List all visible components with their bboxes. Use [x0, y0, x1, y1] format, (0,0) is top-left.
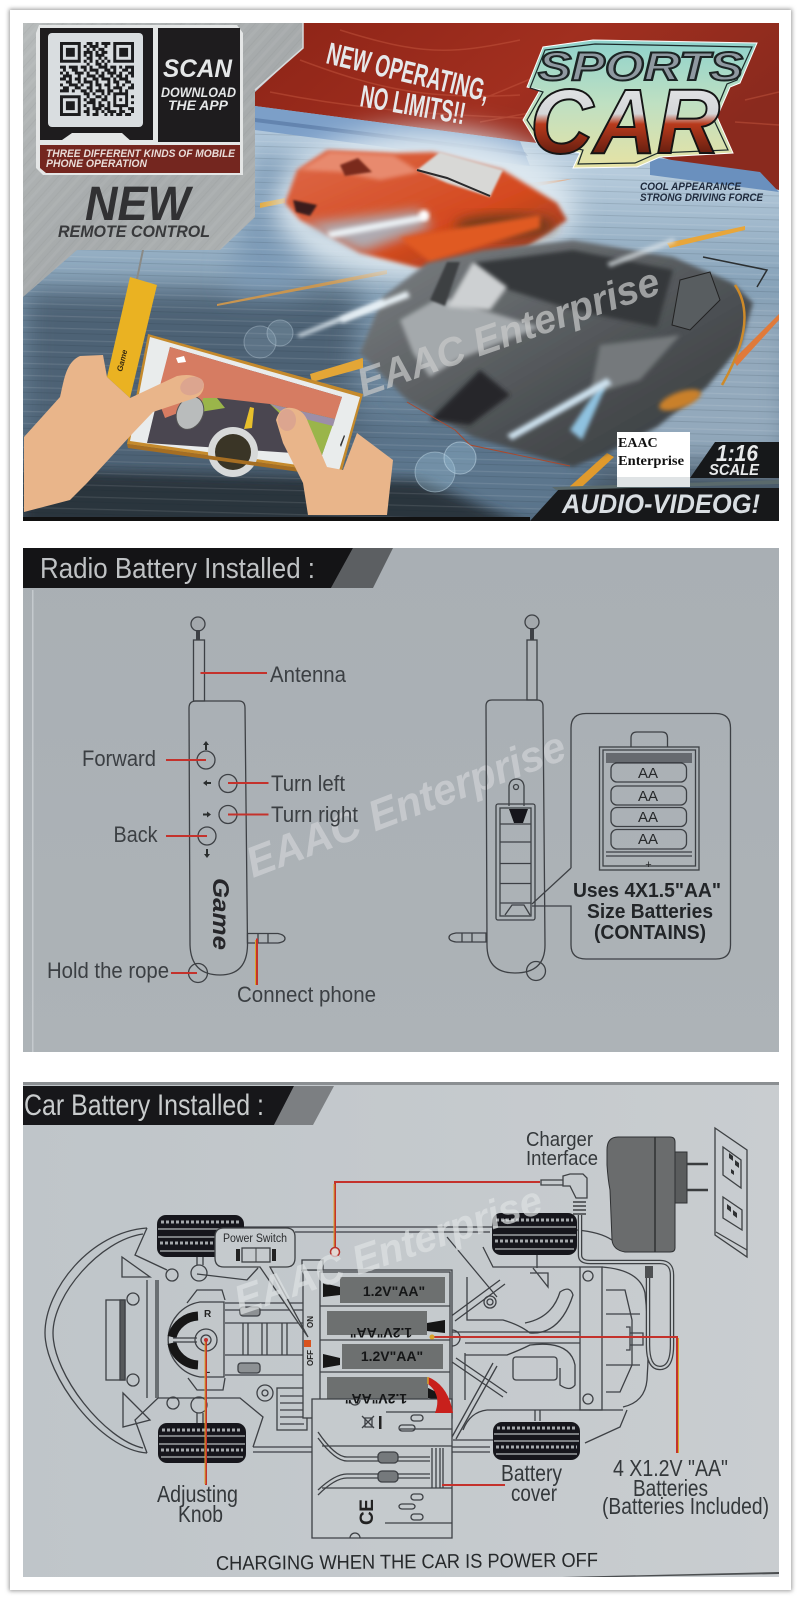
battery cells	[323, 1277, 445, 1400]
battery holder text: AA	[638, 831, 658, 848]
NEW remote control heading: REMOTE CONTROL	[58, 222, 210, 241]
disposal mark	[362, 1416, 382, 1429]
yellow remote in hand: Game	[115, 348, 129, 372]
tagline: cool appearance: STRONG DRIVING FORCE	[640, 192, 764, 204]
turn left label	[228, 771, 345, 796]
car chassis	[45, 1213, 648, 1538]
CE mark: CE	[357, 1499, 378, 1525]
battery description: (CONTAINS)	[594, 922, 706, 944]
logo: Sports Car	[523, 40, 757, 168]
back label	[114, 822, 207, 847]
front bumper and frame	[45, 1227, 492, 1453]
charging note: CHARGING WHEN THE CAR IS POWER OFF	[216, 1550, 598, 1575]
power switch callout: Power Switch	[223, 1233, 287, 1245]
section heading	[23, 548, 393, 588]
battery description	[573, 880, 721, 944]
charger interface label: Charger	[526, 1129, 593, 1151]
forward label: Forward	[82, 746, 156, 771]
watermark: EAAC Enterprise	[240, 722, 573, 887]
batteries label	[602, 1455, 769, 1519]
scan text: SCAN	[163, 55, 233, 83]
slogan: new operating, no limits	[326, 42, 486, 124]
battery description: Uses 4X1.5"AA"	[573, 880, 721, 902]
callout lines and labels	[47, 662, 376, 1007]
rear frame and suspension	[444, 1230, 648, 1443]
back label: Back	[114, 822, 158, 847]
charger adapter	[580, 1137, 708, 1368]
logo word SPORTS: SPORTS	[538, 45, 743, 89]
turn left label: Turn left	[271, 771, 345, 796]
remote body	[189, 701, 248, 975]
forward label	[82, 746, 206, 771]
battery holder	[600, 732, 699, 870]
adjusting knob assembly: L	[204, 1365, 210, 1376]
battery cover label: cover	[511, 1480, 557, 1506]
panel: product box cover	[23, 23, 790, 530]
scan text: THE APP	[168, 98, 229, 113]
charger interface label	[526, 1129, 598, 1170]
slogan: new operating, no limits: NO LIMITS!!	[358, 78, 468, 131]
battery cover	[312, 1399, 452, 1538]
1:16 scale tag	[690, 440, 779, 479]
battery holder text: +	[645, 859, 652, 871]
adjusting knob label: Adjusting	[157, 1481, 238, 1507]
remote back view	[449, 615, 546, 980]
1:16 scale tag: 1:16	[716, 440, 758, 466]
power switch callout: OFF	[306, 1350, 315, 1366]
red removal arrow	[428, 1377, 453, 1413]
EAAC Enterprise stamp: EAAC	[618, 436, 658, 451]
turn right label: Turn right	[271, 802, 358, 827]
adjusting knob label: Knob	[178, 1501, 223, 1527]
wall outlet	[715, 1128, 747, 1257]
EAAC Enterprise stamp	[617, 432, 690, 487]
battery description: Size Batteries	[587, 901, 713, 923]
battery holder text: AA	[638, 765, 658, 782]
grey badge plate	[23, 23, 303, 297]
battery cover label: Battery	[501, 1460, 562, 1486]
NEW remote control heading: NEW	[85, 178, 193, 231]
charger plug	[541, 1174, 587, 1214]
audio-video banner: AUDIO-VIDEOG!	[561, 489, 760, 519]
plug	[248, 934, 285, 943]
red band caption	[46, 150, 236, 167]
QR code	[60, 43, 134, 115]
red band caption: THREE DIFFERENT KINDS OF MOBILE	[46, 148, 236, 160]
road background	[23, 68, 779, 521]
speed streaks	[217, 179, 779, 510]
game logo: Game	[208, 878, 234, 950]
watermark: EAAC Enterprise	[228, 1177, 548, 1324]
arrow marks	[203, 741, 211, 858]
remote front view	[188, 617, 285, 982]
red sky with streaks	[255, 23, 779, 190]
antenna label: Antenna	[270, 662, 347, 687]
battery labels: 1.2V"AA"	[363, 1283, 425, 1299]
battery compartment	[496, 779, 535, 920]
adjusting knob label	[157, 1481, 238, 1527]
tagline: cool appearance	[640, 182, 764, 201]
batteries label: Batteries	[633, 1475, 708, 1501]
wheels	[157, 1213, 580, 1463]
blue track band	[255, 106, 779, 192]
red leader lines	[204, 1182, 678, 1485]
QR scan badge	[36, 25, 243, 175]
red car	[275, 130, 575, 280]
battery labels	[345, 1283, 425, 1407]
right hand	[276, 408, 393, 515]
audio-video banner	[530, 480, 779, 521]
adjusting knob assembly: R	[204, 1309, 212, 1320]
batteries label: 4 X1.2V "AA"	[613, 1455, 728, 1481]
tagline: cool appearance: COOL APPEARANCE	[640, 181, 742, 193]
hold the rope label: Hold the rope	[47, 958, 169, 983]
battery holder text	[638, 765, 658, 871]
rope ring	[188, 964, 208, 982]
power switch callout	[215, 1228, 315, 1366]
1:16 scale tag: SCALE	[709, 462, 760, 479]
yellow remote in hand	[107, 277, 157, 398]
battery cover label	[501, 1460, 562, 1506]
section heading: Radio Battery Installed :	[40, 553, 315, 585]
panel: radio battery installed	[23, 548, 779, 1052]
antenna	[191, 617, 205, 701]
section heading: Car Battery Installed :	[24, 1089, 264, 1122]
adjusting knob assembly	[168, 1290, 225, 1390]
power switch callout: ON	[306, 1316, 315, 1328]
dark car	[360, 240, 767, 467]
scan text: DOWNLOAD	[161, 85, 236, 100]
remote control antenna	[136, 250, 144, 279]
NEW remote control heading	[58, 186, 210, 237]
panel: car battery installed	[23, 1082, 779, 1578]
battery labels: 1.2V"AA"	[350, 1325, 412, 1341]
EAAC Enterprise stamp: Enterprise	[618, 454, 684, 469]
battery holder text: AA	[638, 809, 658, 826]
turn right label	[228, 802, 358, 827]
left hand	[24, 355, 206, 512]
battery labels: 1.2V"AA"	[361, 1348, 423, 1364]
battery labels: 1.2V"AA"	[345, 1391, 407, 1407]
watermark: EAAC Enterprise	[351, 260, 665, 405]
charger interface label: Interface	[526, 1148, 598, 1170]
slogan: new operating, no limits: NEW OPERATING,	[323, 36, 493, 109]
batteries label: (Batteries Included)	[602, 1493, 769, 1519]
battery holder frame	[302, 1260, 452, 1418]
scan text	[161, 59, 236, 110]
battery callout box	[532, 714, 730, 959]
logo word CAR: CAR	[530, 71, 720, 173]
control buttons	[197, 751, 237, 845]
phone with game screen	[127, 334, 363, 478]
connect phone label	[237, 938, 376, 1007]
battery holder text: AA	[638, 788, 658, 805]
red band caption: PHONE OPERATION	[46, 158, 148, 170]
connect phone label: Connect phone	[237, 982, 376, 1007]
light rays and lens bubbles	[244, 238, 676, 492]
